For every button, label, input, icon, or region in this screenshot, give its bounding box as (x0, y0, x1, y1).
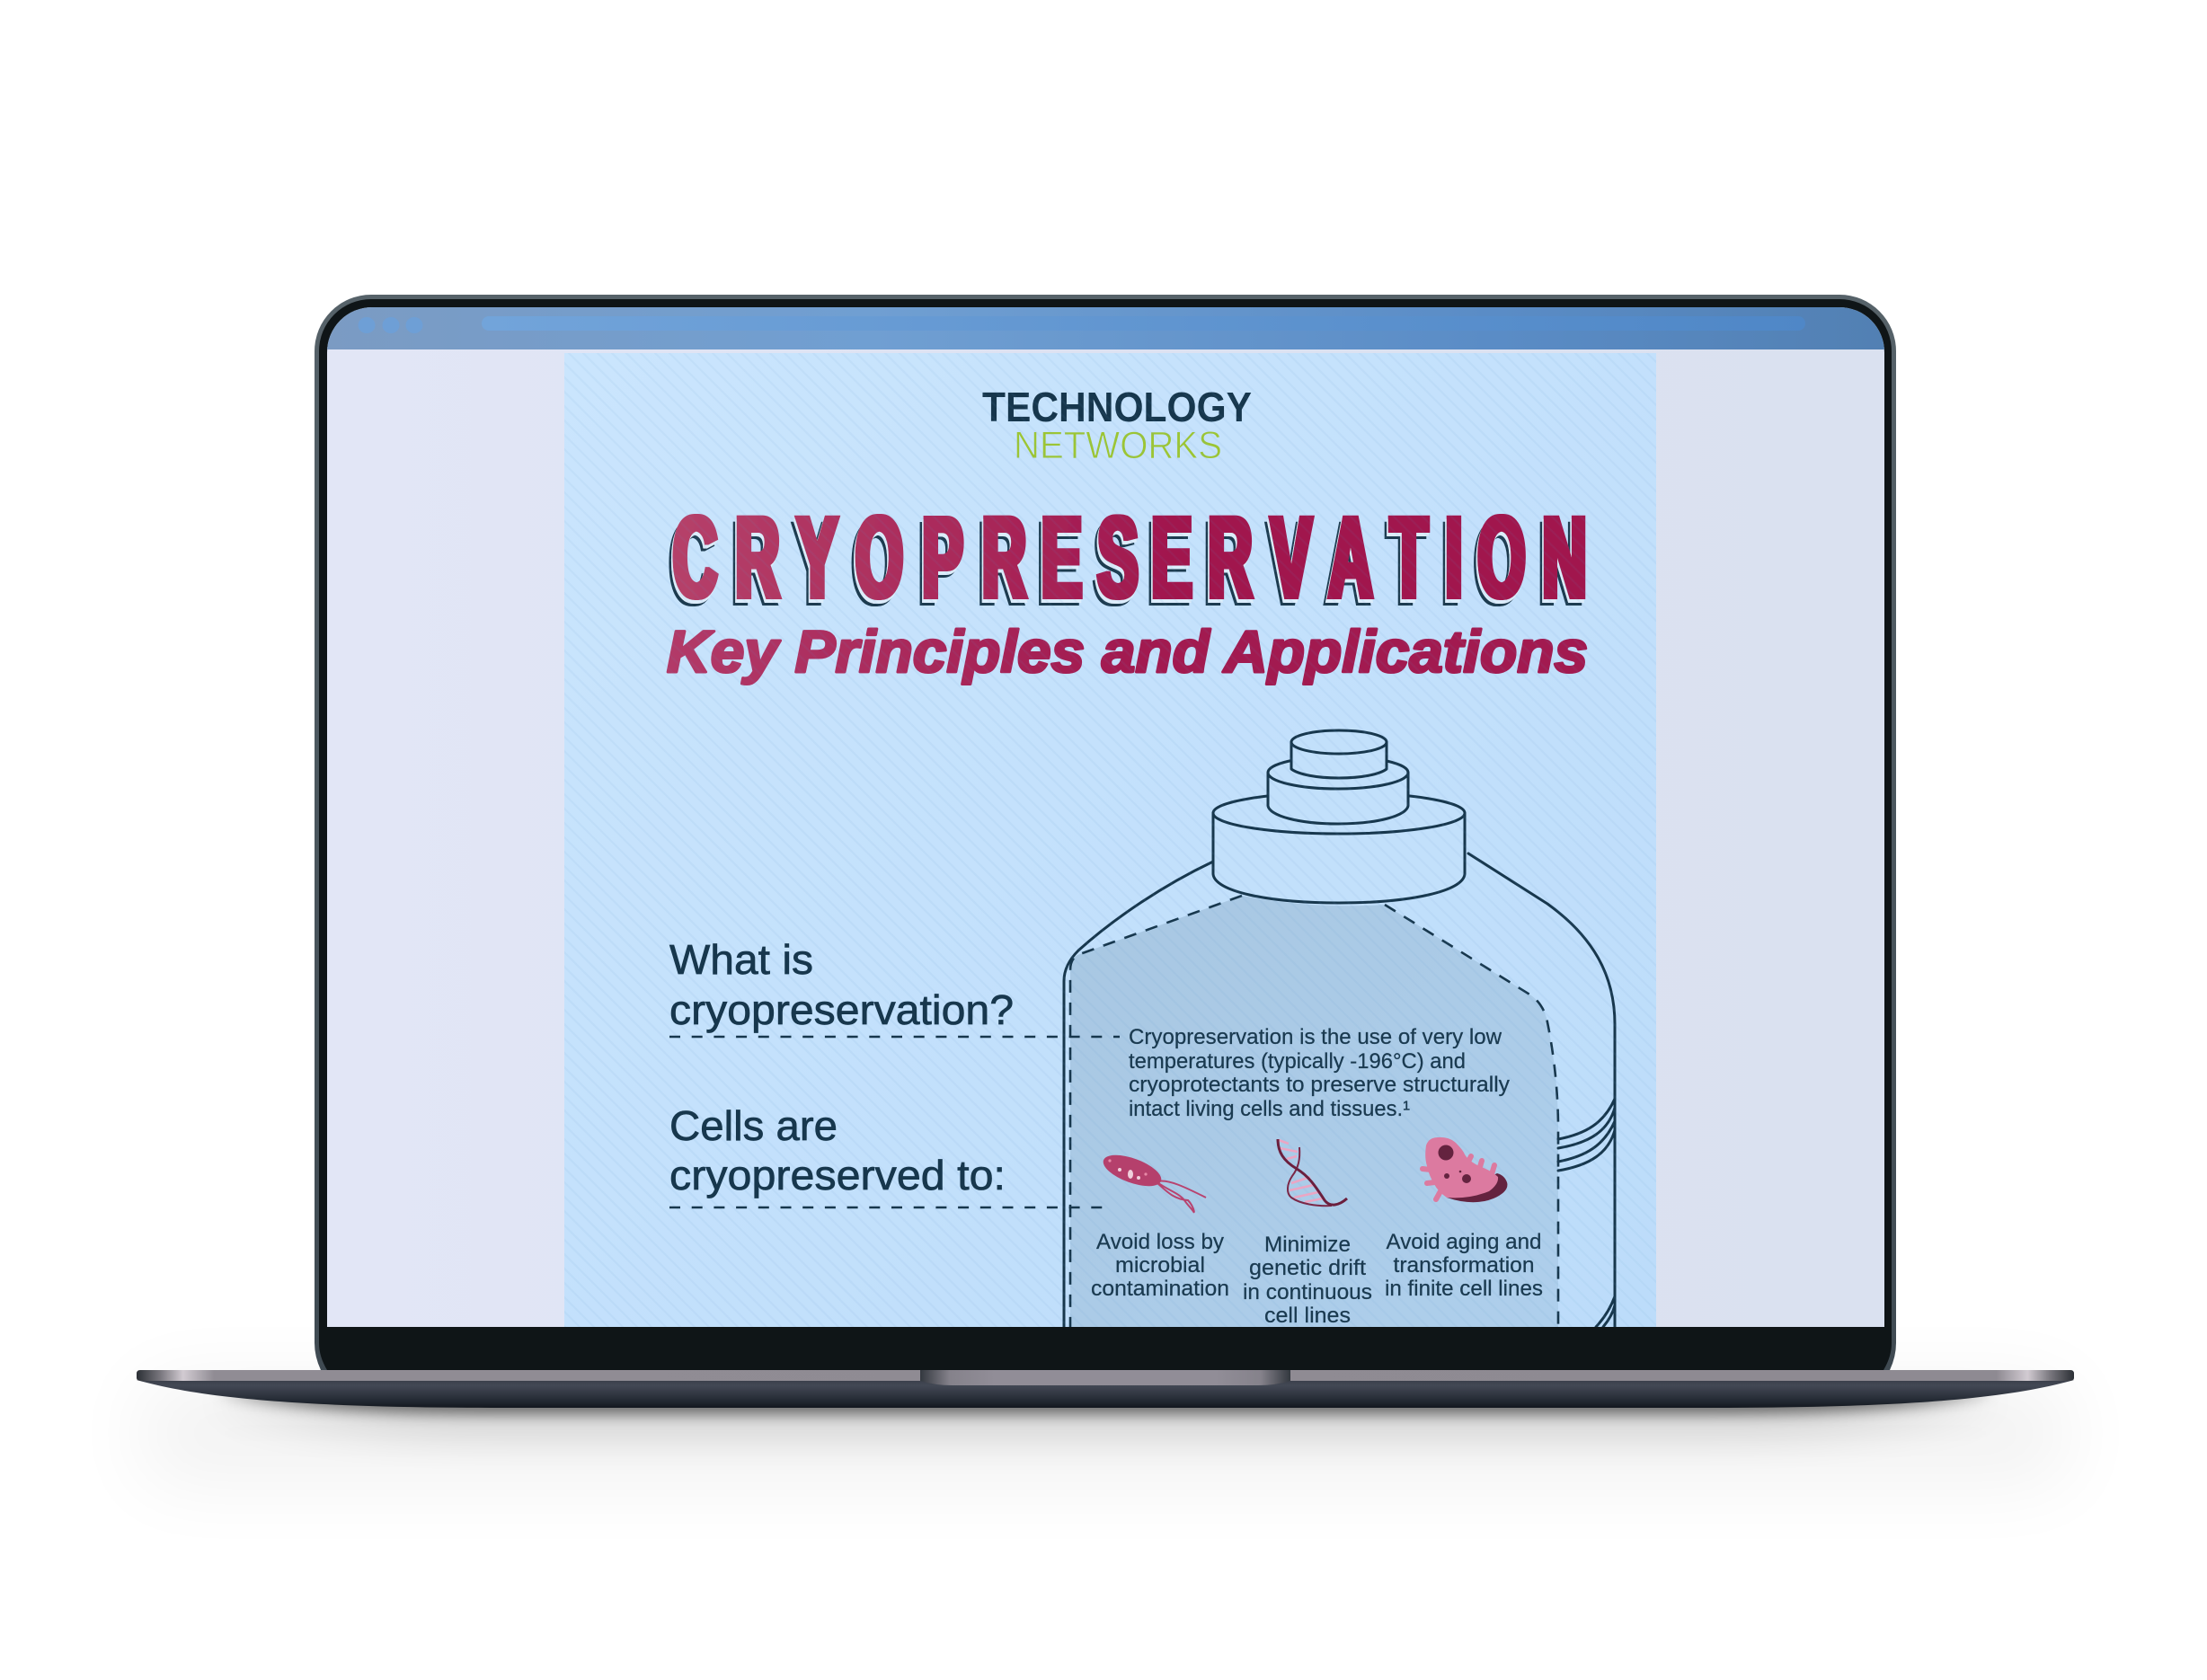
icon: cell (1423, 1137, 1507, 1202)
laptop drop shadow (144, 1384, 2067, 1482)
logo: Technology Networks: TECHNOLOGY (982, 384, 1252, 430)
caption: genetic drift: in continuous (1243, 1280, 1372, 1304)
caption: microbial contamination (1091, 1230, 1229, 1301)
dashed inner outline (1070, 896, 1558, 1330)
bottle side ridges (1558, 1099, 1615, 1327)
heading: cells are cryopreserved to: Cells are (669, 1102, 838, 1149)
caption: genetic drift: genetic drift (1249, 1256, 1366, 1280)
definition paragraph: temperatures (typically -196°C) and (1129, 1049, 1466, 1074)
definition paragraph: Cryopreservation is the use of very low (1129, 1025, 1502, 1049)
browser toolbar (327, 307, 1884, 352)
title: Cryopreservation: CRYOPRESERVATION (673, 492, 1586, 622)
heading: cells are cryopreserved to (669, 1102, 1006, 1198)
caption: microbial contamination: Avoid loss by (1096, 1230, 1225, 1254)
caption: aging and transformation: Avoid aging and (1386, 1230, 1542, 1254)
bottle illustration (1064, 730, 1615, 1330)
caption: genetic drift: Minimize (1264, 1233, 1351, 1257)
page background (564, 353, 1656, 1332)
heading: what is cryopreservation: What is (669, 936, 813, 983)
liquid zone in bottle (1070, 896, 1558, 1330)
definition paragraph (1129, 1025, 1511, 1121)
caption: genetic drift (1243, 1233, 1372, 1328)
caption: aging and transformation: transformation (1393, 1253, 1535, 1278)
infographic page (564, 353, 1656, 1332)
laptop lid bezel (315, 295, 1896, 1370)
address bar (482, 316, 1805, 331)
subtitle: Key Principles and Applications (667, 618, 1588, 685)
browser window dots (358, 317, 422, 333)
laptop base (137, 1370, 2074, 1408)
screen background (327, 307, 1884, 1327)
caption: microbial contamination: microbial (1115, 1253, 1205, 1278)
dashed leader line 1 (669, 1036, 1120, 1038)
logo: Technology Networks: NETWORKS (1014, 424, 1222, 467)
heading: what is cryopreservation (669, 936, 1014, 1033)
logo: Technology Networks (982, 392, 1251, 458)
bottle cap (1213, 730, 1465, 903)
heading: what is cryopreservation: cryopreservation? (669, 986, 1014, 1033)
definition paragraph: cryoprotectants to preserve structurally (1129, 1073, 1511, 1097)
base body (137, 1380, 2074, 1408)
icon: DNA helix (1278, 1139, 1347, 1206)
icon: bacterium (1099, 1149, 1206, 1213)
caption: aging and transformation: in finite cell lines (1385, 1277, 1543, 1301)
base silver edge (137, 1370, 2074, 1381)
definition paragraph: intact living cells and tissues.¹ (1129, 1097, 1410, 1121)
heading: cells are cryopreserved to: cryopreserved to: (669, 1152, 1006, 1198)
caption: microbial contamination: contamination (1091, 1277, 1229, 1301)
caption: aging and transformation (1385, 1230, 1543, 1301)
laptop mockup (137, 295, 2074, 1408)
dashed leader line 2 (669, 1207, 1106, 1208)
caption: genetic drift: cell lines (1264, 1304, 1351, 1328)
hinge notch (920, 1370, 1290, 1385)
bottle outline (1064, 853, 1615, 1330)
